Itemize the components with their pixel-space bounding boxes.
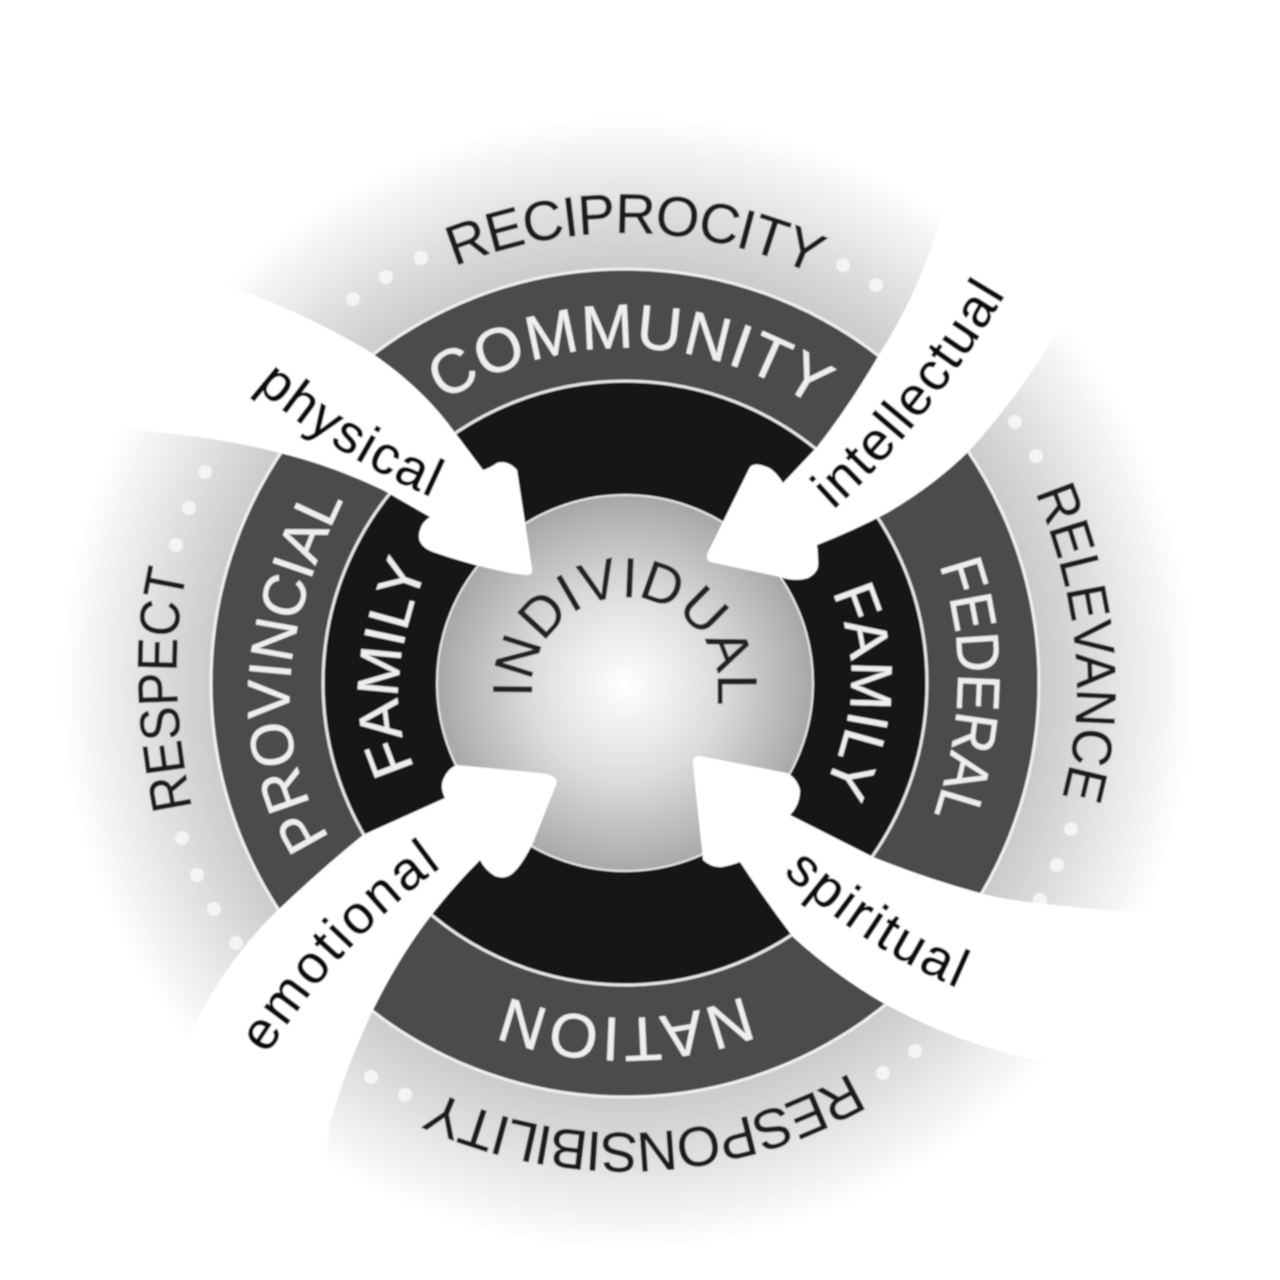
outer glow disc: [59, 115, 1195, 1251]
arrow label: emotional: emotional: [247, 836, 440, 1050]
central individual circle: [437, 495, 813, 871]
label: NATION: NATION: [498, 996, 754, 1062]
label: PROVINCIAL: PROVINCIAL: [246, 498, 344, 856]
label: FAMILY right: FAMILY: [829, 581, 894, 804]
label: RELEVANCE: RELEVANCE: [1036, 482, 1117, 804]
arrow label: physical: physical: [250, 366, 446, 497]
arrow: spiritual: [693, 756, 1220, 1075]
label: COMMUNITY: COMMUNITY: [430, 303, 838, 399]
label: INDIVIDUAL: INDIVIDUAL: [492, 556, 758, 705]
arrow: physical: [60, 255, 532, 575]
outer gray ring: [211, 269, 1039, 1097]
label: RESPONSIBILITY: RESPONSIBILITY: [420, 1074, 866, 1174]
black family ring: [323, 381, 927, 985]
label: RECIPROCITY: RECIPROCITY: [444, 193, 829, 269]
label: RESPECT: RESPECT: [136, 564, 192, 812]
arrow label: intellectual: intellectual: [808, 276, 1005, 509]
dotted accents: [169, 251, 1078, 1102]
label: FEDERAL: FEDERAL: [934, 556, 1001, 816]
arrow: intellectual: [707, 130, 1130, 580]
arrow: emotional: [120, 765, 557, 1210]
arrow label: spiritual: spiritual: [786, 855, 972, 988]
label: FAMILY left: FAMILY: [356, 553, 422, 780]
